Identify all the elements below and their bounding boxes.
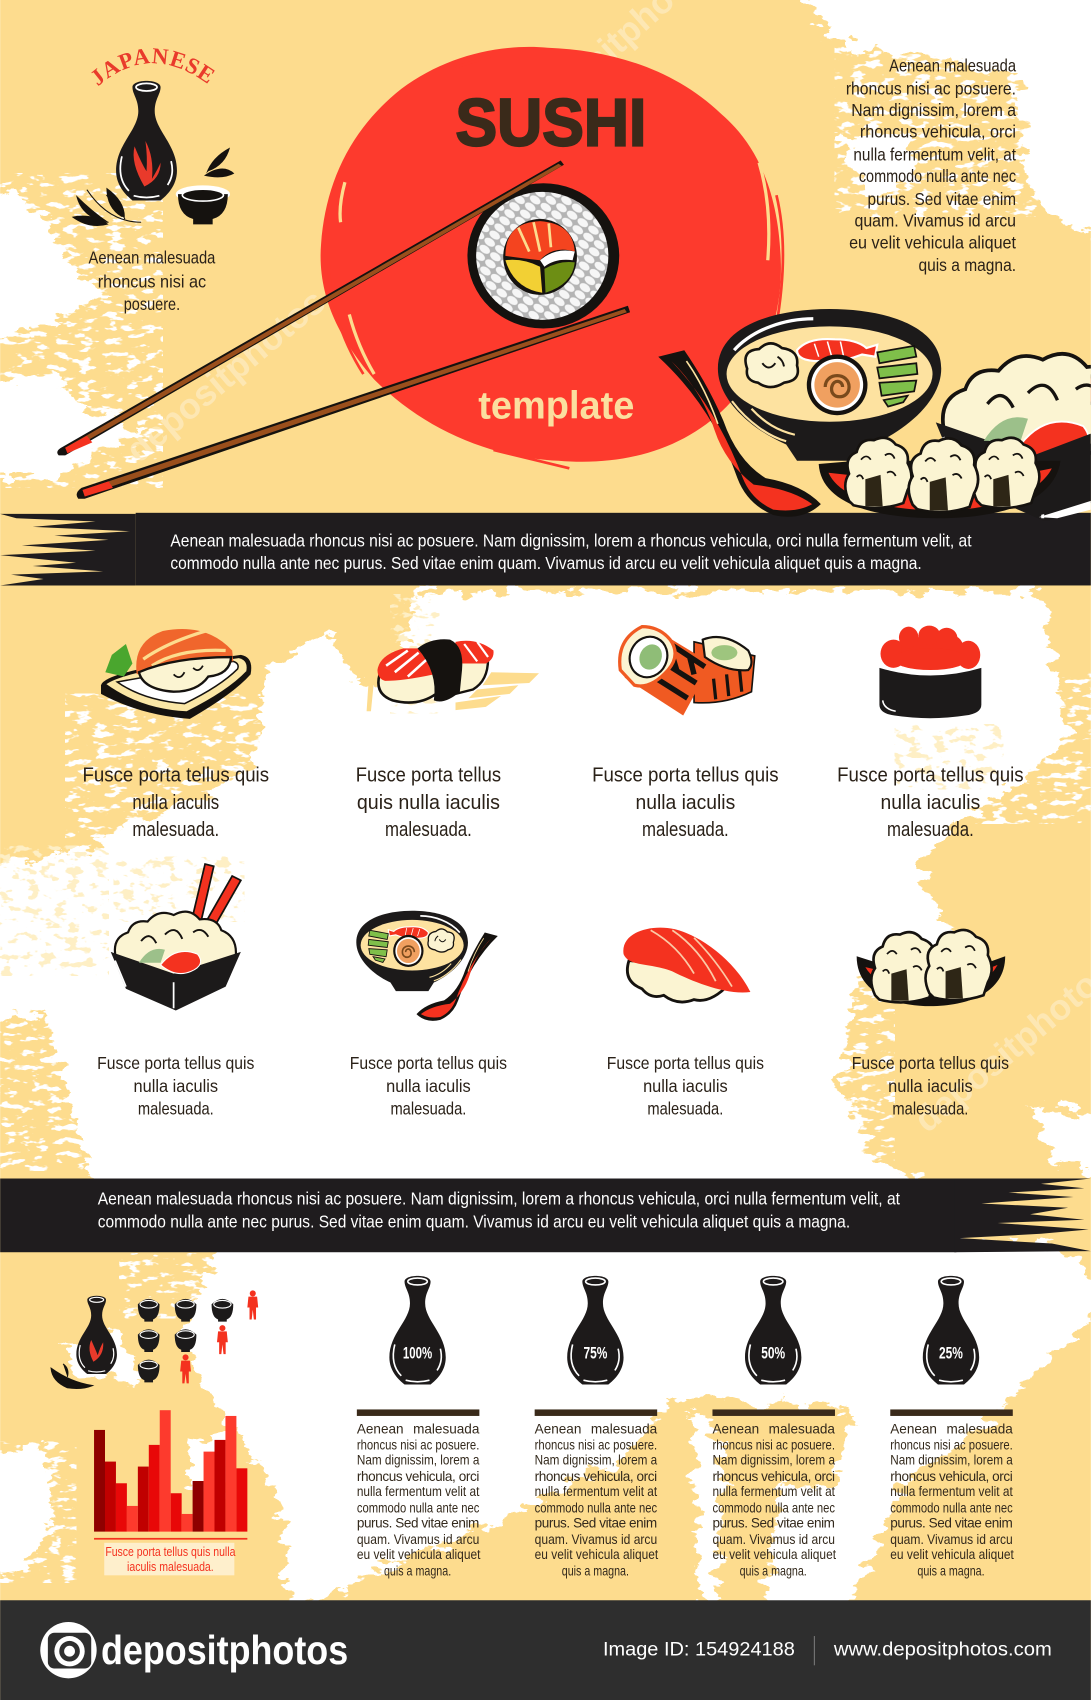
text: row 1 captions bbox=[83, 764, 1024, 841]
text: row 1 captions: Fusce porta tellus bbox=[356, 764, 501, 787]
text column 2: rhoncus nisi ac posuere. bbox=[535, 1438, 657, 1453]
text: row 2 captions: Fusce porta tellus quis bbox=[97, 1053, 255, 1073]
text column 3: Aenean bbox=[712, 1421, 759, 1436]
text: top-right paragraph: Nam dignissim, lorem a bbox=[851, 100, 1016, 120]
footer bar: depositphotos bbox=[101, 1627, 348, 1673]
icon: onigiri on plate bbox=[857, 930, 1005, 1006]
text column 4 bbox=[890, 1409, 1014, 1578]
text column 4: rhoncus vehicula, orci bbox=[890, 1469, 1013, 1484]
icon: camera logo bbox=[40, 1622, 97, 1678]
text column 2: rhoncus vehicula, orci bbox=[535, 1469, 657, 1484]
text column 2: purus. Sed vitae enim bbox=[535, 1516, 657, 1531]
text column 3: rhoncus nisi ac posuere. bbox=[712, 1438, 835, 1453]
text: row 2 captions: nulla iaculis bbox=[134, 1076, 218, 1096]
watermark text bbox=[118, 0, 1091, 1439]
watermark text: depositphotos bbox=[564, 1245, 774, 1439]
text column 2: eu velit vehicula aliquet bbox=[535, 1547, 658, 1562]
top-left heading: JAPANESE bbox=[98, 63, 208, 87]
icon: sake set bbox=[72, 81, 234, 226]
text: top-left caption bbox=[89, 247, 215, 314]
sake bottle 50%: 50% bbox=[761, 1344, 786, 1362]
text column 4: quis a magna. bbox=[917, 1563, 985, 1578]
text column 3: purus. Sed vitae enim bbox=[712, 1516, 835, 1531]
text: row 2 captions: malesuada. bbox=[138, 1099, 214, 1119]
text column 4: quam. Vivamus id arcu bbox=[890, 1532, 1013, 1547]
text column 2: nulla fermentum velit at bbox=[535, 1484, 657, 1499]
sake bottle 25% bbox=[923, 1276, 979, 1385]
bar chart bbox=[94, 1410, 247, 1540]
text column 4: malesuada bbox=[947, 1421, 1013, 1436]
text column 1: eu velit vehicula aliquet bbox=[357, 1547, 481, 1562]
text column 3: Nam dignissim, lorem a bbox=[712, 1453, 835, 1468]
red circle brush edges bbox=[328, 56, 783, 468]
icon: sushi roll bbox=[467, 183, 619, 329]
text: top-right paragraph: purus. Sed vitae enim bbox=[868, 189, 1016, 209]
sake bottle 50% bbox=[745, 1276, 801, 1385]
text: chart caption bbox=[104, 1543, 236, 1575]
text column 1: Nam dignissim, lorem a bbox=[357, 1453, 480, 1468]
text: top-right paragraph bbox=[846, 56, 1016, 275]
text: row 2 captions: nulla iaculis bbox=[386, 1076, 471, 1096]
text: row 2 captions: malesuada. bbox=[647, 1099, 723, 1119]
icon: hero onigiri plate bbox=[819, 438, 1060, 518]
text: top-right paragraph: quis a magna. bbox=[918, 255, 1016, 275]
icon: sake cups and people bbox=[138, 1290, 258, 1383]
text: row 1 captions: nulla iaculis bbox=[132, 791, 219, 814]
text: top-right paragraph: nulla fermentum velit, at bbox=[853, 144, 1016, 164]
icon: sushi pieces with nori bbox=[367, 639, 539, 711]
text: row 1 captions: malesuada. bbox=[642, 818, 729, 841]
icon: nigiri on plate bbox=[101, 629, 251, 719]
text: row 1 captions: malesuada. bbox=[132, 818, 219, 841]
footer bar: www.depositphotos.com bbox=[833, 1639, 1052, 1661]
text column 4: nulla fermentum velit at bbox=[890, 1484, 1013, 1499]
text column 2 bbox=[535, 1409, 658, 1578]
icon: hero soup bowl and spoon bbox=[658, 309, 941, 517]
text: top-right paragraph: eu velit vehicula aliquet bbox=[849, 232, 1016, 252]
text: top-right paragraph: commodo nulla ante nec bbox=[859, 166, 1016, 186]
text column 3: eu velit vehicula aliquet bbox=[712, 1547, 836, 1562]
subtitle: template: template bbox=[478, 384, 634, 427]
text column 3: commodo nulla ante nec bbox=[712, 1500, 835, 1515]
text column 1: nulla fermentum velit at bbox=[357, 1484, 480, 1499]
sake bottle 25%: 25% bbox=[939, 1344, 963, 1362]
text: chart caption: iaculis malesuada. bbox=[127, 1559, 214, 1574]
watermark text: depositphotos bbox=[513, 619, 727, 808]
watermark text: depositphotos bbox=[118, 281, 333, 470]
text: row 2 captions: malesuada. bbox=[390, 1099, 466, 1119]
text column 3: quis a magna. bbox=[740, 1563, 807, 1578]
icon: maki rolls bbox=[620, 627, 755, 716]
text: row 2 captions: Fusce porta tellus quis bbox=[852, 1053, 1009, 1073]
text column 4: commodo nulla ante nec bbox=[890, 1500, 1013, 1515]
text: top-left caption: rhoncus nisi ac bbox=[98, 271, 206, 291]
text: top-left caption: posuere. bbox=[124, 294, 180, 314]
text: row 1 captions: nulla iaculis bbox=[635, 791, 735, 814]
icon: hero rice box bbox=[936, 352, 1091, 518]
text column 1: quam. Vivamus id arcu bbox=[357, 1532, 479, 1547]
sake bottle 75% bbox=[567, 1276, 624, 1385]
chopsticks bbox=[57, 160, 630, 499]
text: row 1 captions: malesuada. bbox=[887, 818, 974, 841]
text: row 2 captions: malesuada. bbox=[892, 1099, 968, 1119]
text column 2: quam. Vivamus id arcu bbox=[535, 1532, 657, 1547]
text: row 2 captions: nulla iaculis bbox=[643, 1076, 728, 1096]
text: top-left caption: Aenean malesuada bbox=[89, 247, 215, 267]
footer bar bbox=[0, 1600, 1091, 1700]
text column 1: Aenean bbox=[357, 1421, 404, 1436]
text column 2: commodo nulla ante nec bbox=[535, 1500, 657, 1515]
text column 3: malesuada bbox=[769, 1421, 835, 1436]
text column 4: purus. Sed vitae enim bbox=[890, 1516, 1013, 1531]
black band 2: Aenean malesuada rhoncus nisi ac posuere. Nam dignissim, lorem a rhoncus vehicula, orci nulla fermentum velit, at bbox=[98, 1189, 900, 1209]
black band 2: commodo nulla ante nec purus. Sed vitae enim quam. Vivamus id arcu eu velit vehicula aliquet quis a magna. bbox=[98, 1211, 850, 1231]
black band 1: commodo nulla ante nec purus. Sed vitae enim quam. Vivamus id arcu eu velit vehicula aliquet quis a magna. bbox=[170, 553, 922, 573]
text column 3 bbox=[712, 1409, 836, 1578]
text column 1: malesuada bbox=[413, 1421, 480, 1436]
text column 1: commodo nulla ante nec bbox=[357, 1500, 480, 1515]
text column 4: Nam dignissim, lorem a bbox=[890, 1453, 1013, 1468]
text column 4: rhoncus nisi ac posuere. bbox=[890, 1438, 1013, 1453]
text column 4: Aenean bbox=[890, 1421, 937, 1436]
watermark text: depositphotos bbox=[118, 948, 327, 1142]
black band 2 bbox=[0, 1179, 1091, 1252]
text column 1: rhoncus nisi ac posuere. bbox=[357, 1438, 479, 1453]
text column 1: quis a magna. bbox=[384, 1563, 451, 1578]
text: top-right paragraph: quam. Vivamus id arcu bbox=[854, 211, 1016, 231]
icon: rice box with chopsticks bbox=[111, 864, 241, 1010]
text column 2: quis a magna. bbox=[562, 1563, 629, 1578]
text: row 1 captions: Fusce porta tellus quis bbox=[592, 764, 779, 787]
text column 2: Nam dignissim, lorem a bbox=[535, 1453, 658, 1468]
text column 3: quam. Vivamus id arcu bbox=[712, 1532, 835, 1547]
text: row 1 captions: malesuada. bbox=[385, 818, 472, 841]
text column 3: rhoncus vehicula, orci bbox=[712, 1469, 835, 1484]
title: SUSHI: SUSHI bbox=[456, 85, 646, 160]
text: row 1 captions: Fusce porta tellus quis bbox=[83, 764, 269, 787]
sake bottle 100%: 100% bbox=[403, 1344, 433, 1362]
sake bottle 75%: 75% bbox=[583, 1344, 608, 1362]
black band 1 bbox=[0, 513, 1091, 585]
text: chart caption: Fusce porta tellus quis nulla bbox=[105, 1544, 236, 1559]
footer bar: Image ID: 154924188 bbox=[603, 1639, 795, 1661]
red brush circle bbox=[321, 47, 781, 462]
text: row 1 captions: nulla iaculis bbox=[881, 791, 980, 814]
black band 1: Aenean malesuada rhoncus nisi ac posuere. Nam dignissim, lorem a rhoncus vehicula, orci nulla fermentum velit, at bbox=[170, 530, 972, 550]
text column 2: Aenean bbox=[535, 1421, 581, 1436]
icon: salmon nigiri bbox=[623, 928, 750, 1002]
text: row 2 captions bbox=[97, 1053, 1009, 1119]
text: row 1 captions: quis nulla iaculis bbox=[357, 791, 500, 814]
icon: soup bowl with spoon bbox=[356, 911, 498, 1021]
text column 1: rhoncus vehicula, orci bbox=[357, 1469, 479, 1484]
text: row 2 captions: nulla iaculis bbox=[888, 1076, 973, 1096]
text: row 1 captions: Fusce porta tellus quis bbox=[837, 764, 1024, 787]
text column 2: malesuada bbox=[591, 1421, 658, 1436]
text column 1: purus. Sed vitae enim bbox=[357, 1516, 479, 1531]
text: top-right paragraph: rhoncus vehicula, orci bbox=[860, 122, 1016, 142]
text: JAPANESE bbox=[91, 48, 215, 86]
sake bottle 100% bbox=[389, 1276, 446, 1385]
text: row 2 captions: Fusce porta tellus quis bbox=[350, 1053, 507, 1073]
text column 1 bbox=[357, 1409, 481, 1578]
text: top-right paragraph: Aenean malesuada bbox=[889, 56, 1016, 76]
text: top-right paragraph: rhoncus nisi ac posuere. bbox=[846, 78, 1016, 98]
text column 4: eu velit vehicula aliquet bbox=[890, 1547, 1014, 1562]
icon: small sake bottle bbox=[51, 1296, 117, 1388]
icon: gunkan with roe bbox=[879, 626, 981, 718]
text column 3: nulla fermentum velit at bbox=[712, 1484, 835, 1499]
text: row 2 captions: Fusce porta tellus quis bbox=[607, 1053, 764, 1073]
